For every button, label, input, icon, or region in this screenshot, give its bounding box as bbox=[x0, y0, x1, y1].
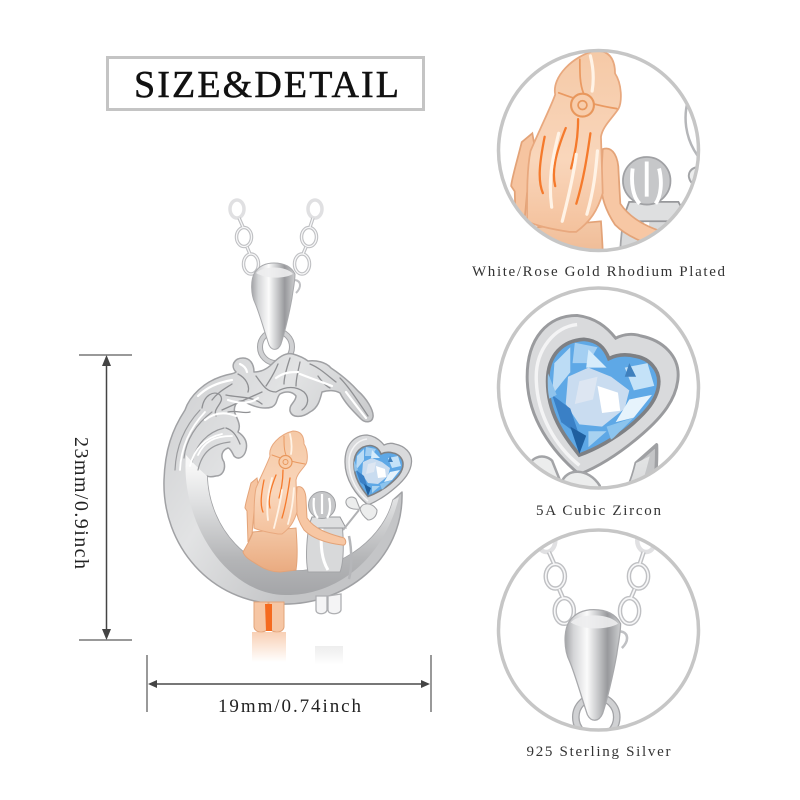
moon body bbox=[185, 455, 399, 595]
panel: stone detail bbox=[496, 286, 700, 515]
wave details bbox=[175, 358, 368, 470]
wave and crescent moon bbox=[164, 354, 402, 604]
height dimension bbox=[70, 355, 132, 640]
chain bbox=[230, 200, 322, 293]
child legs bbox=[316, 594, 341, 614]
panel: silver bail detail bbox=[498, 529, 698, 760]
panel: stone detail: 5A Cubic Zircon bbox=[536, 503, 662, 519]
title: SIZE&DETAIL bbox=[134, 64, 399, 106]
panel: silver bail detail: 925 Sterling Silver bbox=[526, 744, 670, 760]
woman figure bbox=[243, 431, 346, 572]
heart charm bbox=[345, 435, 412, 505]
child figure bbox=[307, 492, 377, 579]
width dimension bbox=[147, 655, 431, 717]
reflection bbox=[252, 632, 343, 666]
pendant necklace bbox=[164, 200, 412, 666]
panel: plating detail: White/Rose Gold Rhodium Plated bbox=[472, 264, 726, 280]
width dimension: 19mm/0.74inch bbox=[218, 696, 362, 717]
height dimension: 23mm/0.9inch bbox=[70, 437, 92, 569]
jump ring bbox=[258, 328, 294, 366]
panel: plating detail bbox=[472, 48, 725, 276]
woman legs bbox=[254, 602, 284, 632]
bail bbox=[252, 263, 295, 349]
title bbox=[108, 58, 424, 110]
